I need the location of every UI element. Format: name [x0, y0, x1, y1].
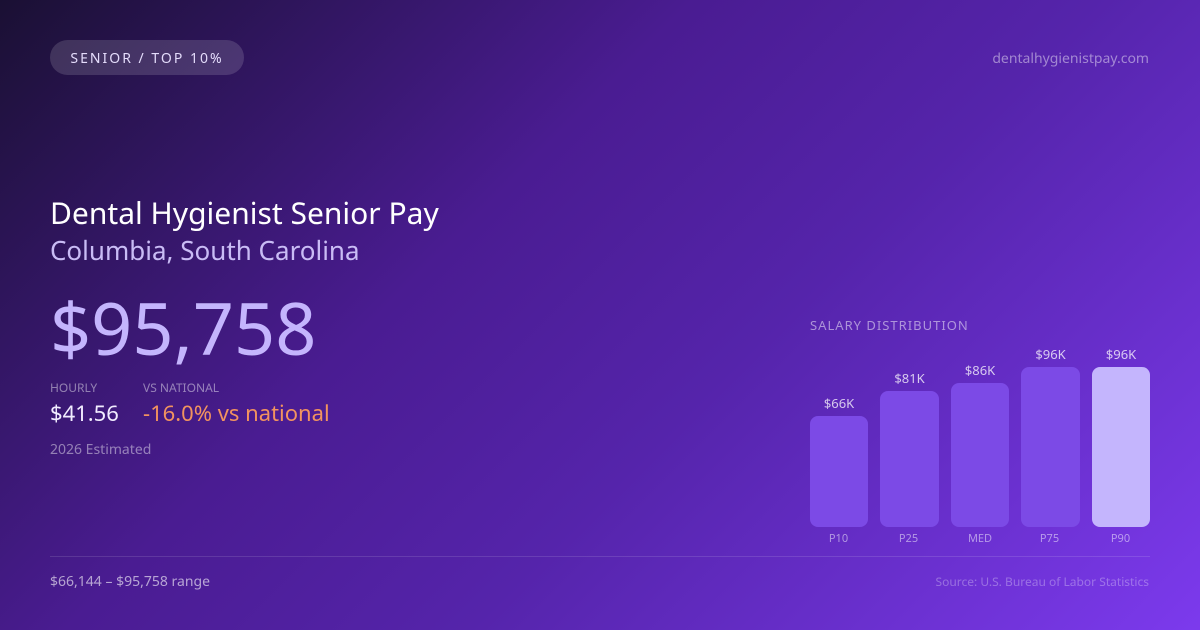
axis label: P10: P10 [829, 531, 848, 546]
footer: salary range: $66,144 – $95,758 range [50, 572, 210, 591]
axis label: P75: P75 [1040, 531, 1059, 546]
value label: median: $86K [965, 361, 995, 379]
year note: 2026 Estimated [50, 440, 151, 459]
stat: hourly [50, 379, 119, 428]
site domain: dentalhygienistpay.com [992, 49, 1149, 68]
value label: P25: $81K [894, 369, 925, 387]
bar: P90 [1092, 367, 1150, 527]
value label: P75: $96K [1035, 345, 1066, 363]
axis label: P25: P25 [899, 531, 918, 546]
bar: P75 [1021, 367, 1080, 527]
bar: P10 [810, 416, 868, 527]
badge: senior / top 10%: SENIOR / TOP 10% [70, 49, 224, 68]
axis label: P90: P90 [1111, 531, 1130, 546]
footer: source: Source: U.S. Bureau of Labor Statistics [936, 573, 1149, 590]
hourly label: HOURLY [50, 379, 97, 396]
vs national value: -16.0% vs national [143, 398, 330, 428]
chart heading: SALARY DISTRIBUTION [810, 316, 969, 334]
hourly value: $41.56 [50, 398, 119, 428]
stat: vs national [143, 379, 330, 428]
subtitle: location: Columbia, South Carolina [50, 232, 360, 268]
value label: P10: $66K [824, 394, 854, 412]
bar: P25 [880, 391, 939, 527]
badge: senior / top 10% [50, 40, 244, 75]
vs national label: VS NATIONAL [143, 379, 219, 396]
bar chart: salary distribution [810, 316, 1150, 546]
bar: median [951, 383, 1009, 527]
value label: P90: $96K [1106, 345, 1136, 363]
axis label: median: MED [968, 531, 992, 546]
title: Dental Hygienist Senior Pay [50, 192, 439, 233]
headline salary: $95,758 [50, 279, 316, 377]
